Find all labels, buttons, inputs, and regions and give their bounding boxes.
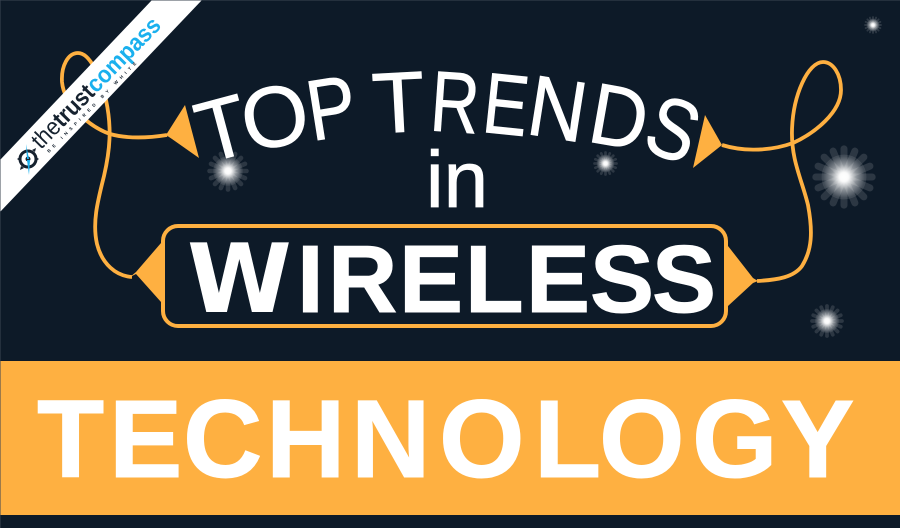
heading: TOP TRENDS	[186, 54, 712, 183]
heading: TECHNOLOGY: TECHNOLOGY	[37, 378, 854, 501]
wire: left upper loop and lower lead	[62, 53, 167, 277]
sparkle: lower right	[812, 306, 842, 336]
frame around WIRELESS	[163, 226, 726, 326]
corner ribbon with logo	[0, 0, 202, 212]
arrowhead: top right	[693, 115, 722, 168]
heading: TOP TRENDS: N	[522, 57, 594, 161]
heading: in: in	[426, 135, 488, 224]
sparkle: upper right small	[865, 17, 881, 33]
heading: TOP TRENDS: S	[634, 76, 712, 183]
heading: TOP TRENDS: T	[370, 54, 427, 152]
wire: right upper loop and lower lead	[722, 62, 841, 281]
arrowhead: lower right	[728, 246, 758, 306]
heading: TOP TRENDS: R	[428, 54, 483, 153]
ribbon band	[0, 0, 202, 212]
heading: TOP TRENDS: O	[234, 64, 316, 171]
sparkle: right large	[816, 149, 872, 205]
logo tagline: BE INSPIRED BY WHITE	[46, 61, 137, 154]
logo wordmark: thetrustcompass	[26, 12, 167, 154]
heading: WIRELESS: WIRELESS	[187, 225, 716, 335]
heading: TOP TRENDS: T	[186, 75, 259, 181]
arrowhead: top left	[166, 105, 199, 158]
logo icon: compass	[17, 144, 39, 175]
sparkle: centre right	[594, 152, 616, 174]
arrowhead: lower left	[130, 243, 161, 302]
heading: TOP TRENDS: P	[300, 57, 363, 159]
heading: TOP TRENDS: D	[583, 64, 656, 169]
orange banner	[0, 361, 900, 515]
heading: TOP TRENDS: E	[479, 55, 533, 155]
sparkle: over the letter T	[210, 153, 246, 189]
